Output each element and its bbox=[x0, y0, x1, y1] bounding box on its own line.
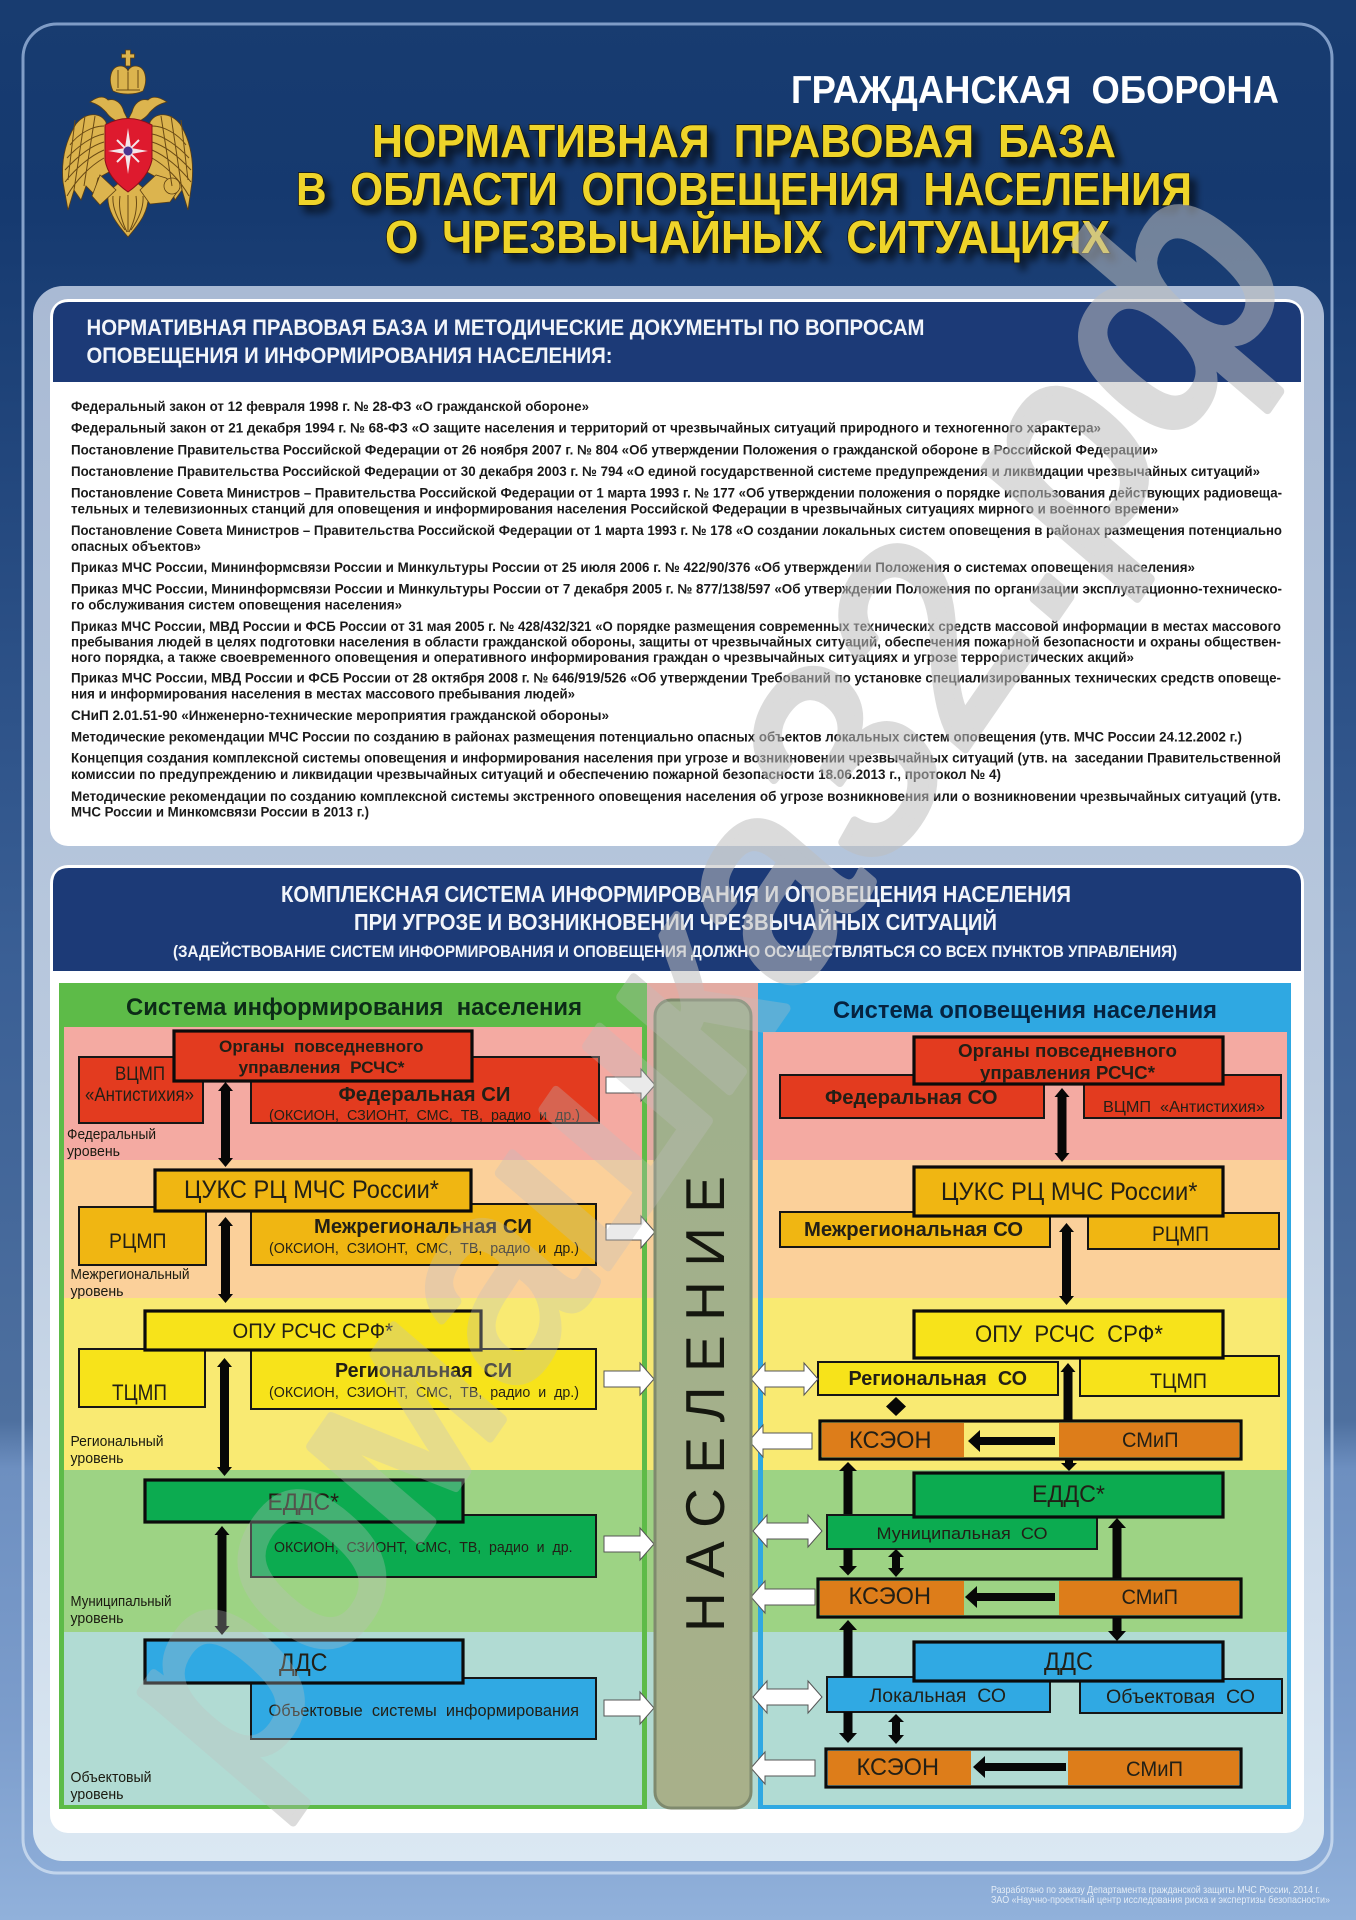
documents list: пребывания людей в целях подготовки населения в области гражданской обороны, защиты от чрезвычайных ситуаций, обеспечения пожарной безопасности и охраны обществен- bbox=[71, 634, 1281, 650]
documents header: ОПОВЕЩЕНИЯ И ИНФОРМИРОВАНИЯ НАСЕЛЕНИЯ: bbox=[86, 343, 612, 368]
KSEON bar: regional bbox=[820, 1421, 1241, 1459]
KSEON bar: object: КСЭОН bbox=[856, 1754, 939, 1781]
level bands bbox=[64, 1027, 642, 1805]
system header: (ЗАДЕЙСТВОВАНИЕ СИСТЕМ ИНФОРМИРОВАНИЯ И ОПОВЕЩЕНИЯ ДОЛЖНО ОСУЩЕСТВЛЯТЬСЯ СО ВСЕХ ПУНКТОВ УПРАВЛЕНИЯ) bbox=[173, 942, 1177, 961]
main title bbox=[296, 115, 1192, 263]
federal level boxes bbox=[79, 1031, 599, 1124]
documents list: Приказ МЧС России, Мининформсвязи России и Минкультуры России от 25 июля 2006 г. № 422/90/376 «Об утверждении Положения о системах оповещения населения» bbox=[71, 560, 1195, 575]
documents list: СНиП 2.01.51-90 «Инженерно-технические мероприятия гражданской обороны» bbox=[71, 708, 609, 723]
level labels: Федеральный bbox=[67, 1126, 156, 1143]
documents list: Федеральный закон от 21 декабря 1994 г. № 68-ФЗ «О защите населения и территорий от чрезвычайных ситуаций природного и техногенного характера» bbox=[71, 420, 1101, 436]
level labels: уровень bbox=[70, 1610, 124, 1627]
interregional level boxes: Межрегиональная СИ bbox=[314, 1216, 532, 1238]
panel: legal documents bbox=[50, 299, 1304, 846]
icon: emblem of EMERCOM bbox=[63, 50, 192, 237]
documents list: опасных объектов» bbox=[71, 539, 201, 554]
subtitle: Гражданская оборона: ГРАЖДАНСКАЯ ОБОРОНА bbox=[791, 69, 1279, 112]
regional level boxes: ОПУ РСЧС СРФ* bbox=[975, 1321, 1163, 1348]
level labels: уровень bbox=[70, 1450, 124, 1467]
regional level boxes: ТЦМП bbox=[112, 1380, 167, 1405]
heading: warning system: Система оповещения населения bbox=[833, 997, 1217, 1024]
level labels: Межрегиональный bbox=[70, 1266, 190, 1283]
main title: НОРМАТИВНАЯ ПРАВОВАЯ БАЗА bbox=[372, 115, 1116, 167]
documents list: Постановление Правительства Российской Федерации от 26 ноября 2007 г. № 804 «Об утверждении Положения о гражданской обороне в Российской Федерации» bbox=[71, 442, 1158, 458]
documents list: Методические рекомендации по созданию комплексной системы экстренного оповещения населения об угрозе возникновения или о возникновении чрезвычайных ситуаций (утв. bbox=[71, 789, 1281, 804]
federal level boxes: Органы повседневного bbox=[219, 1037, 424, 1056]
population column: НАСЕЛЕНИЕ bbox=[674, 1176, 736, 1632]
population column bbox=[655, 1000, 751, 1808]
documents list: Федеральный закон от 12 февраля 1998 г. № 28-ФЗ «О гражданской обороне» bbox=[71, 399, 589, 414]
KSEON bar: municipal: КСЭОН bbox=[848, 1583, 931, 1610]
documents header bbox=[53, 302, 1301, 382]
object level boxes: ДДС bbox=[279, 1649, 328, 1677]
municipal level boxes: ОКСИОН, СЗИОНТ, СМС, ТВ, радио и др. bbox=[274, 1539, 572, 1556]
federal level boxes bbox=[780, 1037, 1281, 1118]
level bands behind the central column bbox=[647, 983, 758, 1809]
regional level boxes: Региональная СИ bbox=[335, 1360, 512, 1382]
documents list: го обслуживания систем оповещения населения» bbox=[71, 598, 402, 612]
black arrows bbox=[839, 1088, 1126, 1744]
object level boxes: Объектовая СО bbox=[1106, 1687, 1255, 1708]
level labels: Региональный bbox=[70, 1433, 164, 1450]
KSEON bar: municipal: СМиП bbox=[1122, 1586, 1178, 1609]
KSEON bar: object: СМиП bbox=[1126, 1758, 1183, 1781]
regional level boxes: Региональная СО bbox=[848, 1368, 1027, 1390]
level labels: Муниципальный bbox=[70, 1593, 172, 1610]
main title: В ОБЛАСТИ ОПОВЕЩЕНИЯ НАСЕЛЕНИЯ bbox=[296, 163, 1192, 215]
federal level boxes: управления РСЧС* bbox=[980, 1063, 1155, 1083]
municipal level boxes bbox=[827, 1473, 1223, 1549]
documents list: тельных и телевизионных станций для оповещения и информирования населения Российской Федерации в чрезвычайных ситуациях мирного и военного времени» bbox=[71, 502, 1179, 516]
federal level boxes: Федеральная СИ bbox=[338, 1084, 510, 1106]
interregional level boxes: ЦУКС РЦ МЧС России* bbox=[184, 1176, 439, 1204]
federal level boxes: управления РСЧС* bbox=[238, 1058, 405, 1077]
KSEON bar: regional: СМиП bbox=[1122, 1429, 1178, 1452]
heading: information system: Система информирования населения bbox=[126, 994, 582, 1021]
federal level boxes: ВЦМП bbox=[115, 1064, 165, 1085]
municipal level boxes: ЕДДС* bbox=[268, 1489, 339, 1516]
documents list: Приказ МЧС России, Мининформсвязи России и Минкультуры России от 7 декабря 2005 г. № 877/138/597 «Об утверждении Положения по организации эксплуатационно-техническо- bbox=[71, 582, 1282, 596]
footer credits bbox=[991, 1884, 1330, 1906]
KSEON bar: object bbox=[826, 1749, 1241, 1787]
level labels bbox=[67, 1126, 190, 1803]
interregional level boxes bbox=[780, 1167, 1279, 1249]
panel: warning system bbox=[749, 983, 1291, 1809]
interregional level boxes bbox=[79, 1170, 596, 1265]
object level boxes bbox=[827, 1642, 1282, 1713]
municipal level boxes: Муниципальная СО bbox=[876, 1524, 1048, 1543]
object level boxes: Объектовые системы информирования bbox=[268, 1701, 579, 1720]
documents list: Постановление Совета Министров – Правительства Российской Федерации от 1 марта 1993 г. № 178 «О создании локальных систем оповещения в районах размещения потенциально bbox=[71, 523, 1282, 538]
federal level boxes: «Антистихия» bbox=[85, 1085, 194, 1106]
documents list bbox=[71, 399, 1282, 820]
panel: information system bbox=[59, 983, 655, 1809]
municipal level boxes bbox=[145, 1480, 596, 1577]
documents list: Постановление Правительства Российской Федерации от 30 декабря 2003 г. № 794 «О единой государственной системе предупреждения и ликвидации чрезвычайных ситуаций» bbox=[71, 464, 1260, 479]
documents list: комиссии по предупреждению и ликвидации чрезвычайных ситуаций и обеспечению пожарной безопасности 18.06.2013 г., протокол № 4) bbox=[71, 767, 1001, 782]
regional level boxes: ТЦМП bbox=[1150, 1370, 1207, 1393]
documents list: МЧС России и Минкомсвязи России в 2013 г.) bbox=[71, 804, 369, 820]
level labels: уровень bbox=[70, 1786, 124, 1803]
interregional level boxes: РЦМП bbox=[109, 1230, 166, 1253]
level bands bbox=[763, 1032, 1287, 1805]
federal level boxes: Федеральная СО bbox=[825, 1087, 998, 1109]
level labels: уровень bbox=[70, 1283, 124, 1300]
regional level boxes: ОПУ РСЧС СРФ* bbox=[232, 1320, 393, 1343]
arrows to and from population bbox=[749, 1363, 822, 1784]
regional level boxes bbox=[818, 1311, 1279, 1396]
arrows between levels bbox=[214, 1082, 233, 1635]
watermark: ромашка32.рф bbox=[54, 114, 1338, 1839]
interregional level boxes: Межрегиональная СО bbox=[804, 1219, 1023, 1241]
documents list: Методические рекомендации МЧС России по созданию в районах размещения потенциально опасных объектов локальных систем оповещения (утв. МЧС России 24.12.2002 г.) bbox=[71, 730, 1242, 744]
object level boxes bbox=[145, 1640, 596, 1739]
system header bbox=[53, 868, 1301, 971]
documents list: Приказ МЧС России, МВД России и ФСБ России от 31 мая 2005 г. № 428/432/321 «О порядке размещения современных технических средств массовой информации в местах массового bbox=[71, 619, 1281, 634]
documents list: Приказ МЧС России, МВД России и ФСБ России от 28 октября 2008 г. № 646/919/526 «Об утверждении Требований по установке специализированных технических средств оповеще- bbox=[71, 670, 1281, 686]
regional level boxes: (ОКСИОН, СЗИОНТ, СМС, ТВ, радио и др.) bbox=[269, 1384, 579, 1401]
system header: ПРИ УГРОЗЕ И ВОЗНИКНОВЕНИИ ЧРЕЗВЫЧАЙНЫХ СИТУАЦИЙ bbox=[354, 908, 997, 935]
documents list: ния и информирования населения в местах массового пребывания людей» bbox=[71, 686, 575, 702]
documents header: НОРМАТИВНАЯ ПРАВОВАЯ БАЗА И МЕТОДИЧЕСКИЕ ДОКУМЕНТЫ ПО ВОПРОСАМ bbox=[86, 315, 924, 340]
KSEON bar: municipal bbox=[818, 1579, 1241, 1617]
KSEON bar: regional: КСЭОН bbox=[849, 1427, 932, 1454]
main title: О ЧРЕЗВЫЧАЙНЫХ СИТУАЦИЯХ bbox=[385, 211, 1110, 263]
interregional level boxes: ЦУКС РЦ МЧС России* bbox=[941, 1178, 1198, 1206]
arrows to population bbox=[604, 1069, 655, 1724]
municipal level boxes: ЕДДС* bbox=[1032, 1481, 1105, 1508]
interregional level boxes: РЦМП bbox=[1152, 1223, 1209, 1246]
object level boxes: ДДС bbox=[1044, 1648, 1093, 1676]
regional level boxes bbox=[79, 1311, 596, 1409]
documents list: Концепция создания комплексной системы оповещения и информирования населения при угрозе и возникновении чрезвычайных ситуаций (утв. на заседании Правительственной bbox=[71, 750, 1281, 766]
level labels: Объектовый bbox=[70, 1769, 152, 1786]
documents list: Постановление Совета Министров – Правительства Российской Федерации от 1 марта 1993 г. № 177 «Об утверждении положения о порядке использования действующих радиовеща- bbox=[71, 486, 1282, 500]
documents list: ного порядка, а также своевременного оповещения и оперативного информирования граждан о чрезвычайных ситуациях и угрозе террористических акций» bbox=[71, 650, 1134, 665]
system header: КОМПЛЕКСНАЯ СИСТЕМА ИНФОРМИРОВАНИЯ И ОПОВЕЩЕНИЯ НАСЕЛЕНИЯ bbox=[281, 881, 1071, 907]
interregional level boxes: (ОКСИОН, СЗИОНТ, СМС, ТВ, радио и др.) bbox=[269, 1240, 579, 1257]
federal level boxes: (ОКСИОН, СЗИОНТ, СМС, ТВ, радио и др.) bbox=[269, 1107, 580, 1124]
federal level boxes: ВЦМП «Антистихия» bbox=[1103, 1099, 1265, 1116]
federal level boxes: Органы повседневного bbox=[958, 1041, 1177, 1061]
light backing panel bbox=[33, 286, 1324, 1861]
level labels: уровень bbox=[67, 1143, 120, 1160]
panel: comprehensive system bbox=[50, 865, 1304, 1833]
object level boxes: Локальная СО bbox=[870, 1686, 1006, 1707]
